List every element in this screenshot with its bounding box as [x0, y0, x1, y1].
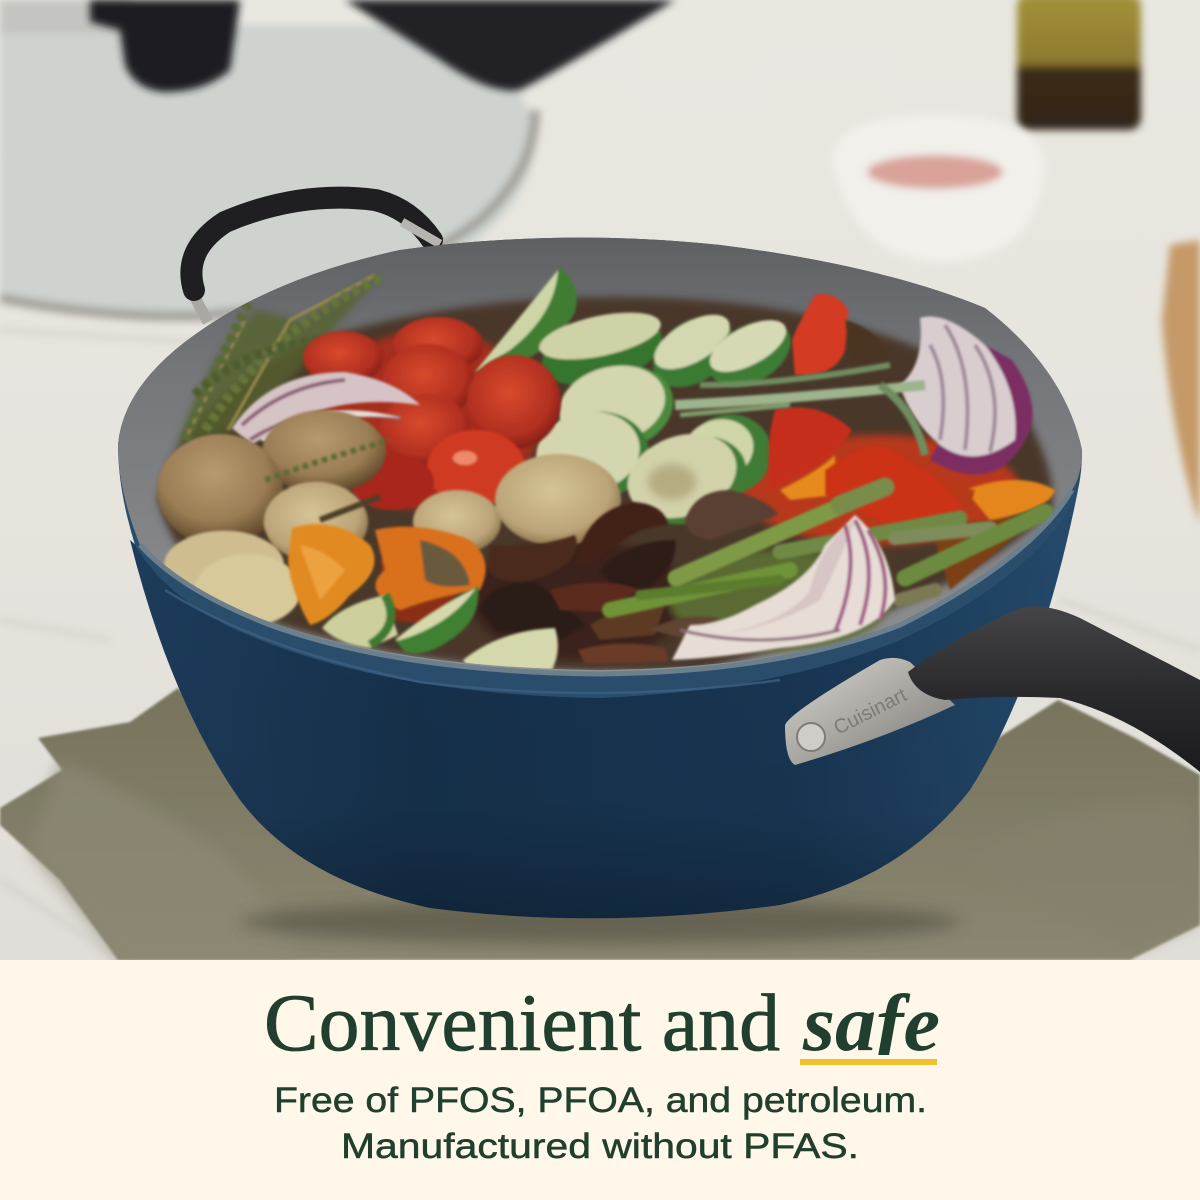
food: rosemary sprig [675, 365, 925, 455]
food: onion wedge front [672, 515, 895, 660]
subtext line 1: Free of PFOS, PFOA, and petroleum. [274, 1081, 927, 1120]
heading: Convenient and [264, 977, 780, 1068]
food: asparagus [610, 487, 1045, 610]
body highlight line [165, 590, 780, 693]
pan body [130, 490, 1078, 918]
rim outer [118, 238, 1082, 698]
saute pan [118, 198, 1200, 918]
steel rivet bracket [785, 658, 955, 765]
pan rim highlight [140, 490, 1072, 674]
food: tomatoes [303, 317, 561, 510]
red and brown base colour patches [320, 330, 1020, 660]
food: right red and orange peppers [768, 294, 1055, 590]
blurred background kitchen props [0, 0, 1200, 960]
all food clipped to pan interior [157, 268, 1055, 672]
marble veins [0, 330, 1200, 960]
food shadow bed [158, 297, 1053, 672]
food: orange peppers [288, 497, 486, 625]
lid knob and dark handle [90, 0, 675, 92]
yellow underline [800, 1059, 937, 1065]
food: potatoes [157, 410, 621, 626]
small white bowl [832, 115, 1045, 262]
mask trimming the f descender [796, 1055, 942, 1075]
food: zucchini front [322, 586, 558, 670]
long right handle [908, 606, 1200, 772]
subtext line 2: Manufactured without PFAS. [341, 1127, 859, 1166]
interior of pan [118, 238, 1082, 674]
food: red onion right [900, 317, 1033, 475]
emphasis word safe: safe [802, 980, 940, 1068]
glass pot lid [0, 0, 535, 319]
steel rivet bracket: Cuisinart [830, 684, 911, 739]
left loop handle [191, 198, 440, 322]
bottom text panel [0, 960, 1200, 1200]
wooden board [1162, 240, 1200, 525]
food: herbs thyme sprigs [185, 275, 380, 440]
burlap trivet cloth [0, 688, 1200, 960]
background: marble counter [0, 0, 1200, 960]
food: thyme mass [178, 275, 380, 445]
oil bottle [1017, 0, 1141, 130]
food: zucchini slices [475, 268, 802, 539]
food: red onion left [232, 372, 420, 445]
food: mushrooms [480, 490, 778, 664]
